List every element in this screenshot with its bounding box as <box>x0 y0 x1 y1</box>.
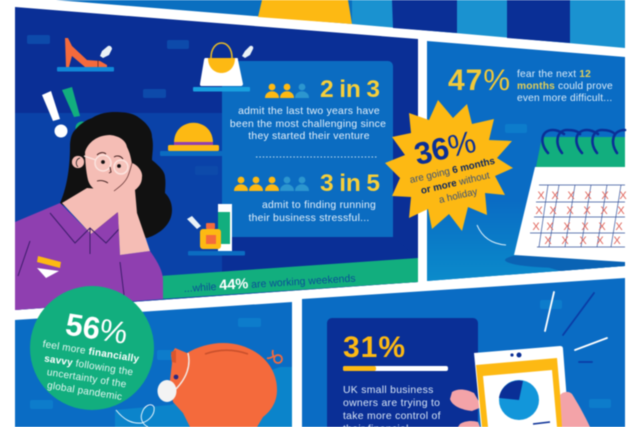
icon: perfume bottle on shelf <box>187 204 245 256</box>
icon: hat on shelf <box>160 123 225 156</box>
calendar crosses: X <box>535 205 543 217</box>
icon: phone with pie chart <box>450 346 590 427</box>
calendar crosses: X <box>584 190 592 202</box>
icon: exclamation marks <box>42 87 88 138</box>
calendar crosses: X <box>596 235 604 247</box>
stat: 31%: 31% <box>343 331 406 364</box>
shadow under calendar <box>505 252 625 268</box>
stat: 36%: 36% <box>411 124 479 172</box>
panel: top strip <box>56 0 625 48</box>
calendar crosses: X <box>567 190 575 202</box>
calendar crosses: X <box>566 205 574 217</box>
text: UK small business owners: take more control of <box>343 411 441 422</box>
progress bar 31% <box>343 366 448 371</box>
shirt <box>15 203 163 310</box>
text: stressful: admit to finding running <box>262 200 376 211</box>
arm and hand <box>112 163 150 255</box>
text: fear next 12 months: fear the next 12 <box>517 69 591 80</box>
text: UK small business owners: owners are trying to <box>343 398 440 409</box>
text: six months without holiday: or more without <box>420 170 491 197</box>
stats card <box>222 61 393 237</box>
decorative swirl line <box>116 405 154 427</box>
stat: 2 in 3: 2 in 3 <box>320 76 380 103</box>
icon: 2 of 3 people <box>265 84 309 98</box>
calendar crosses: X <box>561 235 569 247</box>
green band: working weekends <box>160 258 418 299</box>
icon: wall calendar <box>514 130 627 262</box>
neck and chest skin <box>62 188 118 234</box>
text: UK small business owners: UK small business <box>343 385 434 396</box>
calendar crosses: X <box>551 190 559 202</box>
panel: stressed business owner <box>15 7 418 310</box>
calendar crosses: X <box>600 205 608 217</box>
wall brick marks <box>27 35 218 175</box>
text: savvy following pandemic: feel more financially <box>42 339 140 365</box>
icon: high heel on shelf <box>57 38 114 72</box>
card: 31% <box>327 318 478 427</box>
calendar crosses: X <box>537 190 545 202</box>
calendar rings <box>542 130 625 153</box>
green band: working weekends: ...while 44% are working weekends <box>183 270 356 296</box>
hair <box>60 112 172 238</box>
text: six months without holiday: are going 6 months <box>409 156 496 186</box>
calendar crosses: X <box>617 205 625 217</box>
panel: holiday and outlook <box>427 41 627 281</box>
text: challenging years: been the most challenging since <box>230 119 386 130</box>
callout: 56% green circle <box>30 286 154 410</box>
calendar crosses: X <box>601 190 609 202</box>
stat: 3 in 5: 3 in 5 <box>320 170 380 197</box>
text: savvy following pandemic: global pandemic <box>46 380 123 403</box>
calendar crosses: X <box>563 221 571 233</box>
panel: taking control of finances <box>302 278 625 427</box>
icon: 3 of 5 people <box>234 177 309 191</box>
icon: emphasis rays <box>545 292 607 362</box>
text: challenging years: they started their venture <box>248 131 370 142</box>
calendar crosses: X <box>544 235 552 247</box>
calendar crosses: X <box>549 205 557 217</box>
calendar crosses: X <box>532 221 540 233</box>
icon: handbag on shelf <box>193 43 253 92</box>
calendar crosses <box>532 190 627 247</box>
text: savvy following pandemic: uncertainty of the <box>46 367 127 391</box>
illustration: piggy bank with mask <box>158 343 282 427</box>
calendar crosses: X <box>583 205 591 217</box>
text: savvy following pandemic: savvy following the <box>43 353 134 378</box>
text: fear next 12 months: months could prove <box>517 81 613 92</box>
text: challenging years: admit the last two years have <box>238 106 380 117</box>
ear <box>72 156 84 168</box>
calendar crosses: X <box>615 221 623 233</box>
text: stressful: their business stressful... <box>248 213 370 224</box>
stat: 56%: 56% <box>63 307 130 351</box>
badge <box>37 256 61 268</box>
calendar crosses: X <box>579 235 587 247</box>
calendar crosses: X <box>581 221 589 233</box>
text: six months without holiday: a holiday <box>438 186 479 206</box>
calendar crosses: X <box>613 235 621 247</box>
panel: financially savvy <box>15 286 292 427</box>
glasses and features <box>95 155 111 171</box>
stat: 47%: 47% <box>448 64 511 97</box>
callout: 36% starburst <box>385 100 513 231</box>
pie chart <box>499 380 539 420</box>
text: fear next 12 months: even more difficult... <box>517 93 612 104</box>
calendar grid <box>530 185 625 247</box>
face <box>85 135 133 194</box>
calendar crosses: X <box>546 221 554 233</box>
calendar crosses: X <box>598 221 606 233</box>
illustration: worried woman <box>15 112 172 310</box>
calendar crosses: X <box>619 190 627 202</box>
